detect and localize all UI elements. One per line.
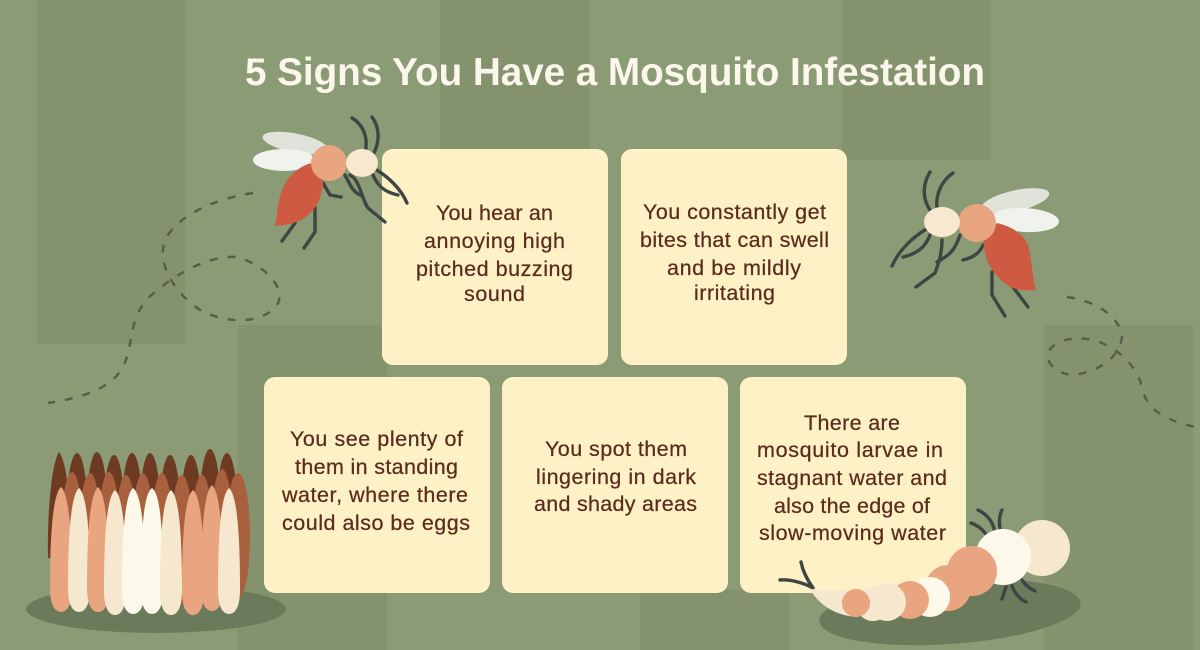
card 4: lingering in dark <box>536 465 696 489</box>
card 2: You constantly get <box>643 200 826 224</box>
card 4: You spot them <box>545 437 687 461</box>
card 3: them in standing <box>295 455 458 479</box>
card 3 <box>264 377 490 593</box>
card 2: and be mildly <box>667 256 801 280</box>
card 4 <box>502 377 728 593</box>
card 5: stagnant water and <box>757 466 947 490</box>
card 2: bites that can swell <box>640 228 829 252</box>
card 4: and shady areas <box>534 492 697 516</box>
card 1: annoying high <box>424 229 565 253</box>
card 1 <box>382 149 608 365</box>
larva shadow <box>817 571 1083 650</box>
icon: mosquito larva <box>780 510 1083 650</box>
flight path: left dashed trail <box>48 193 280 403</box>
card 5: also the edge of <box>774 494 930 518</box>
card 3: You see plenty of <box>290 427 463 451</box>
card 5: There are <box>804 411 900 435</box>
icon: mosquito right <box>892 172 1060 316</box>
flight path: right dashed trail <box>1048 297 1195 427</box>
icon: mosquito left <box>253 117 407 248</box>
card 2 <box>621 149 847 365</box>
card 5 <box>740 377 966 593</box>
card 1: pitched buzzing <box>416 257 573 281</box>
icon: eggs cluster <box>26 449 286 633</box>
egg shadow <box>26 585 286 633</box>
card 5: mosquito larvae in <box>757 438 943 462</box>
card 3: water, where there <box>281 483 468 507</box>
card 5: slow-moving water <box>759 521 946 545</box>
card 3: could also be eggs <box>282 511 470 535</box>
card 2: irritating <box>694 281 775 305</box>
card 1: You hear an <box>436 201 553 225</box>
card 1: sound <box>464 282 525 306</box>
title: 5 Signs You Have a Mosquito Infestation <box>245 51 985 94</box>
